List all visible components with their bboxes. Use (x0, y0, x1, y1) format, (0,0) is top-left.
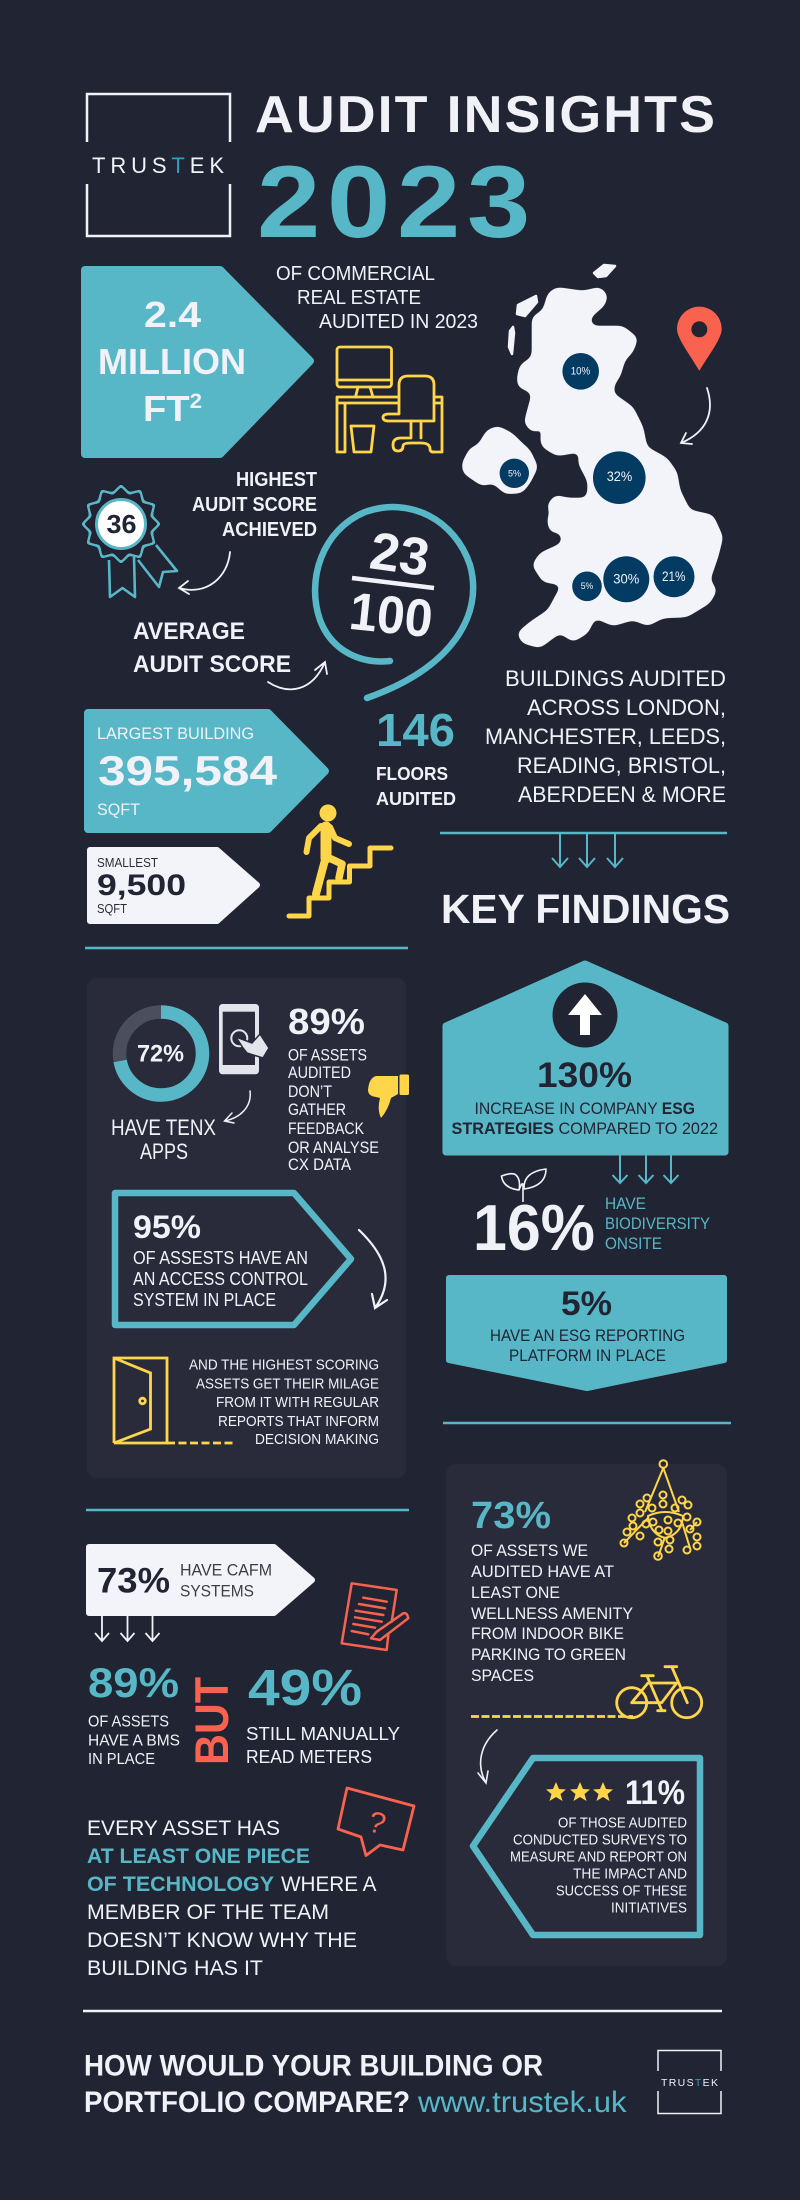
footer call to action: www.trustek.uk (417, 2086, 628, 2119)
text: every asset: WHERE A (281, 1873, 376, 1896)
panel: 5% ESG reporting (449, 1278, 724, 1388)
text: of commercial real estate: OF COMMERCIAL (276, 263, 435, 285)
label: BUT: BUT (185, 1677, 238, 1765)
panel: 5% ESG reporting: PLATFORM IN PLACE (509, 1346, 666, 1365)
icon: rosette 36: 36 (106, 509, 136, 539)
map percentages: 30% (613, 570, 639, 586)
stat: 73% wellness: FROM INDOOR BIKE (471, 1624, 624, 1643)
stat: 89%: 89% (288, 1001, 365, 1042)
arrows: below CAFM (95, 1616, 160, 1641)
map: UK (462, 265, 723, 648)
panel: 73% CAFM: HAVE CAFM (180, 1560, 272, 1580)
icon: up arrow (568, 994, 602, 1035)
panel: tech findings (87, 978, 409, 1478)
stat: 16% biodiversity (473, 1191, 710, 1264)
panel: 130% ESG strategies: INCREASE IN COMPANY ESG (474, 1099, 695, 1118)
map percentages: 21% (662, 568, 686, 584)
swirl around score (315, 507, 473, 698)
panel: smallest building: SMALLEST (97, 856, 158, 870)
panel: 5% ESG reporting: HAVE AN ESG REPORTING (490, 1326, 685, 1345)
panel: 130% ESG strategies (446, 964, 725, 1152)
stat: 89% BMS: HAVE A BMS (88, 1732, 180, 1750)
panel: 11% surveys: OF THOSE AUDITED (558, 1816, 687, 1832)
logo: footer Trustek: TRUSTEK (661, 2077, 718, 2089)
text: highest scoring assets (189, 1356, 379, 1448)
stat: 146 floors audited: 146 (376, 704, 455, 756)
text: every asset: AT LEAST ONE PIECE (87, 1845, 310, 1868)
text: have tenx apps: HAVE TENX (111, 1115, 216, 1140)
title: 2023 (257, 145, 537, 259)
panel: 95% access control (115, 1193, 351, 1325)
text: average audit score: AUDIT SCORE (133, 651, 291, 678)
panel: 11% surveys: MEASURE AND REPORT ON (510, 1850, 687, 1866)
panel: 11% surveys: INITIATIVES (611, 1900, 687, 1916)
text: every asset: EVERY ASSET HAS (87, 1817, 280, 1840)
logo: footer Trustek (658, 2050, 721, 2114)
icon: door (114, 1358, 235, 1443)
stat: 49% manual meters: STILL MANUALLY (246, 1723, 400, 1744)
text: average audit score: AVERAGE (133, 618, 245, 645)
map landmass (462, 287, 723, 648)
title: AUDIT INSIGHTS (255, 86, 717, 144)
footer call to action: PORTFOLIO COMPARE? (84, 2086, 410, 2119)
panel: 11% surveys: 11% (625, 1774, 685, 1812)
panel: 130% ESG strategies: 130% (537, 1056, 632, 1095)
text: every asset: DOESN’T KNOW WHY THE (87, 1929, 357, 1952)
text: highest audit score (192, 469, 317, 541)
panel: smallest building (90, 850, 257, 921)
footer call to action: HOW WOULD YOUR BUILDING OR (84, 2050, 543, 2082)
text: buildings audited across: MANCHESTER, LEEDS, (485, 724, 726, 749)
icon: document and pen (342, 1583, 408, 1650)
chart: 72% donut: 72% (137, 1040, 184, 1068)
stat: 73% wellness: PARKING TO GREEN (471, 1645, 626, 1664)
panel: 95% access control: SYSTEM IN PLACE (133, 1290, 276, 1310)
map percentages: 5% (581, 581, 594, 592)
text: highest audit score: AUDIT SCORE (192, 494, 317, 516)
panel: 11% surveys: SUCCESS OF THESE (556, 1884, 687, 1900)
panel: smallest building: 9,500 (97, 869, 186, 902)
map percentages: 5% (508, 468, 522, 480)
stat: 16% biodiversity: 16% (473, 1191, 595, 1264)
text: buildings audited across: ACROSS LONDON, (527, 695, 726, 720)
stat: 89%: FEEDBACK (288, 1120, 364, 1138)
stat: 73% wellness: AUDITED HAVE AT (471, 1562, 614, 1581)
stat: 16% biodiversity: HAVE (605, 1194, 646, 1213)
panel: 11% surveys: CONDUCTED SURVEYS TO (513, 1832, 687, 1848)
text: have tenx apps (111, 1115, 216, 1164)
text: highest audit score: HIGHEST (236, 469, 317, 491)
stat: 73% wellness: WELLNESS AMENITY (471, 1604, 633, 1623)
text: buildings audited across (485, 666, 726, 807)
stat: 73% wellness (471, 1495, 633, 1685)
text: highest scoring assets: FROM IT WITH REGULAR (216, 1394, 379, 1411)
icon: question speech bubble: ? (365, 1805, 389, 1842)
stat: 89%: AUDITED (288, 1064, 351, 1082)
arrows: below ESG panel (612, 1155, 678, 1183)
stat: 16% biodiversity: ONSITE (605, 1234, 662, 1253)
text: every asset: MEMBER OF THE TEAM (87, 1901, 329, 1924)
panel: 2.4 million square feet: FT (143, 388, 187, 429)
text: highest audit score: ACHIEVED (222, 519, 317, 541)
panel: 73% CAFM (89, 1547, 312, 1613)
text: every asset: BUILDING HAS IT (87, 1957, 263, 1980)
panel: largest building: LARGEST BUILDING (97, 724, 254, 743)
stat: 89%: CX DATA (288, 1156, 351, 1174)
stat: 89%: OR ANALYSE (288, 1139, 379, 1157)
stat: 49% manual meters: 49% (248, 1659, 362, 1716)
arrow: 95% to door (359, 1230, 387, 1308)
map percentages: 32% (607, 468, 632, 484)
arrow: pin to map (681, 388, 710, 444)
panel: largest building (88, 713, 325, 829)
logo: Trustek: TRUSTEK (92, 153, 224, 178)
stat: 73% wellness: SPACES (471, 1666, 534, 1685)
icon: question speech bubble (338, 1788, 414, 1856)
stat: 73% wellness: 73% (471, 1495, 551, 1537)
stat: 49% manual meters (246, 1659, 400, 1767)
icon: hanging plant (620, 1460, 700, 1560)
text: average audit score (133, 618, 291, 678)
panel: 2.4 million square feet: 2 (190, 390, 202, 413)
footer call to action (84, 2050, 628, 2119)
map percentages (508, 366, 686, 592)
panel: largest building: 395,584 (98, 747, 278, 794)
panel: 130% ESG strategies: STRATEGIES COMPARED TO 2022 (452, 1119, 718, 1138)
heading: key findings: KEY FINDINGS (441, 886, 730, 932)
text: highest scoring assets: AND THE HIGHEST SCORING (189, 1356, 379, 1374)
icon: rosette 36 (81, 484, 177, 597)
panel: 2.4 million square feet (85, 270, 310, 454)
stat: 146 floors audited (376, 704, 456, 809)
icon: thumbs down (368, 1074, 409, 1118)
icon: phone and hand (219, 1004, 269, 1074)
panel: 5% ESG reporting: 5% (561, 1285, 612, 1323)
stat: 73% wellness: LEAST ONE (471, 1583, 560, 1602)
map islands (509, 265, 615, 354)
icon: bicycle (617, 1667, 702, 1718)
stat: 16% biodiversity: BIODIVERSITY (605, 1214, 710, 1233)
arrow: highest score to rosette (179, 552, 230, 594)
text: of commercial real estate (276, 263, 478, 333)
stat: 89% BMS (88, 1659, 180, 1768)
arrow: phone to text (224, 1091, 250, 1123)
dashed road (471, 1715, 633, 1718)
arrow: wellness to surveys (478, 1730, 497, 1783)
score: 23 out of 100: 23 (366, 521, 433, 588)
arrow: average to score (268, 662, 327, 689)
score: 23 out of 100: 100 (347, 582, 435, 649)
panel: 73% CAFM: SYSTEMS (180, 1582, 254, 1600)
text: highest scoring assets: REPORTS THAT INFORM (218, 1413, 379, 1430)
text: every asset (87, 1817, 376, 1980)
score: 23 out of 100 (347, 521, 435, 649)
icon: location pin (677, 307, 722, 371)
map percentages: 10% (571, 366, 590, 378)
panel: 11% surveys: THE IMPACT AND (573, 1866, 687, 1882)
stat: 146 floors audited: FLOORS (376, 764, 448, 784)
stat: 89%: DON’T (288, 1083, 332, 1101)
title (255, 86, 717, 259)
icon: desk and chair (337, 347, 442, 452)
icon: person on stairs (289, 804, 391, 916)
panel: 11% surveys (473, 1758, 700, 1935)
panel: 95% access control: AN ACCESS CONTROL (133, 1269, 308, 1289)
icon: sprout (502, 1169, 546, 1202)
stat: 89% BMS: IN PLACE (88, 1751, 155, 1768)
stat: 89% (288, 1001, 379, 1174)
stat: 146 floors audited: AUDITED (376, 789, 456, 809)
stat: 49% manual meters: READ METERS (246, 1746, 372, 1767)
stat: 89% BMS: OF ASSETS (88, 1714, 169, 1730)
panel: 73% CAFM: 73% (97, 1562, 170, 1600)
text: of commercial real estate: AUDITED IN 2023 (319, 311, 478, 333)
line and arrows to key findings (440, 833, 727, 867)
text: have tenx apps: APPS (140, 1139, 188, 1164)
text: buildings audited across: BUILDINGS AUDITED (505, 666, 726, 691)
panel: smallest building: SQFT (97, 902, 127, 916)
text: highest scoring assets: ASSETS GET THEIR MILAGE (196, 1376, 379, 1392)
panel: wellness (446, 1460, 727, 1966)
panel: 95% access control: 95% (133, 1209, 201, 1245)
panel: 2.4 million square feet: 2.4 (144, 294, 201, 335)
stat: 89% BMS: 89% (88, 1659, 179, 1706)
stat: 89%: OF ASSETS (288, 1046, 367, 1064)
text: buildings audited across: ABERDEEN & MORE (518, 782, 726, 807)
text: of commercial real estate: REAL ESTATE (297, 287, 421, 309)
icon: three stars (546, 1782, 613, 1801)
map circles (500, 353, 694, 602)
text: buildings audited across: READING, BRISTOL, (517, 753, 726, 778)
panel: 2.4 million square feet: MILLION (98, 341, 246, 382)
text: highest scoring assets: DECISION MAKING (255, 1431, 379, 1448)
text: every asset: OF TECHNOLOGY (87, 1873, 274, 1896)
panel: 95% access control: OF ASSESTS HAVE AN (133, 1248, 308, 1268)
panel: largest building: SQFT (97, 800, 140, 819)
stat: 89%: GATHER (288, 1101, 346, 1119)
chart: 72% donut (120, 1012, 202, 1095)
stat: 73% wellness: OF ASSETS WE (471, 1541, 588, 1560)
logo: Trustek (87, 94, 230, 236)
